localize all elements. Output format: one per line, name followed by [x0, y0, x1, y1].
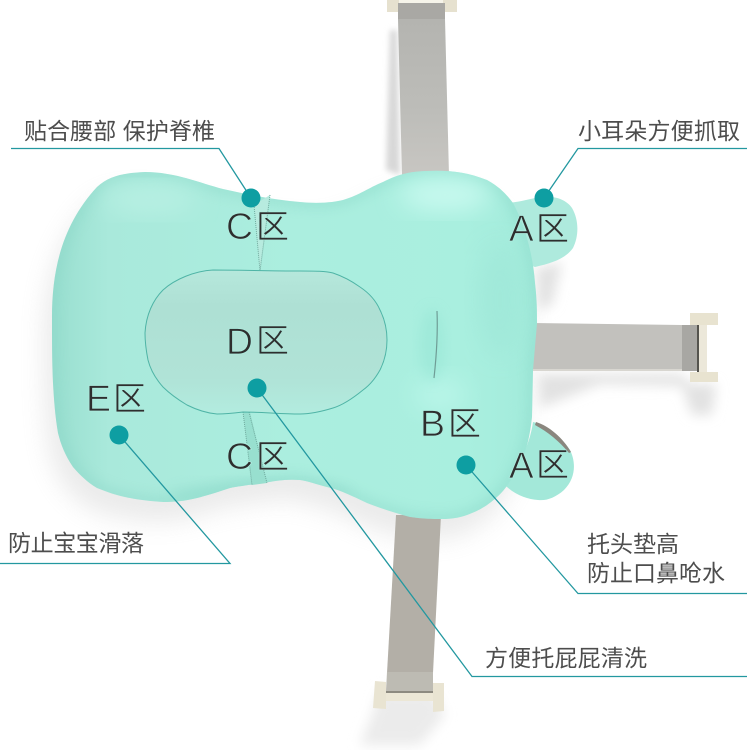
zone label: C top: [226, 200, 289, 248]
seam wedge: top: [254, 195, 270, 271]
cushion body: [52, 171, 537, 519]
zone label: A bottom: A: [509, 445, 534, 486]
zone label: D: [226, 314, 289, 362]
right strap and buckle: [533, 313, 718, 382]
soft highlights: [400, 179, 490, 211]
caption: easy washing: 方便托屁屁清洗: [485, 645, 647, 671]
zone label: C top: 区: [256, 200, 289, 248]
zone label: E: [86, 372, 146, 420]
zone label: B: 区: [448, 397, 481, 445]
caption: anti slip: 防止宝宝滑落: [8, 530, 144, 556]
leader line: B zone: [466, 465, 747, 594]
zone label: C top: C: [226, 206, 253, 247]
zone label: D: 区: [256, 314, 289, 362]
leader line: C zone: [11, 148, 251, 198]
zone label: A top: 区: [536, 202, 569, 250]
zone label: A top: [509, 202, 569, 250]
bottom strap and buckle: [373, 515, 444, 712]
zone label: A top: A: [509, 208, 534, 249]
edge shading: [52, 171, 537, 519]
caption: waist support: 贴合腰部 保护脊椎: [24, 118, 215, 144]
zone label: C bottom: C: [226, 436, 253, 477]
zone label: B: [420, 397, 481, 445]
marker dot: B zone: [456, 456, 476, 474]
top strap and buckle: [387, 0, 457, 175]
marker dot: E zone: [110, 426, 128, 444]
zone label: B: B: [420, 403, 445, 444]
panel: inner mesh zone D: [145, 270, 387, 414]
marker dot: A zone: [534, 188, 554, 208]
lower ear: [503, 422, 574, 500]
leader line: D zone: [257, 388, 747, 676]
seam wedge: bottom: [243, 412, 267, 485]
marker dot: C zone: [242, 188, 260, 208]
caption: head support: 托头垫高: [587, 531, 679, 557]
caption: head support: [587, 531, 725, 586]
zone label: A bottom: 区: [536, 438, 569, 486]
zone label: E: E: [86, 378, 111, 419]
zone label: A bottom: [509, 438, 569, 486]
caption: head support: 防止口鼻呛水: [587, 560, 725, 586]
leader line: A zone: [544, 148, 747, 198]
zone label: E: 区: [113, 372, 146, 420]
caption: ear grip: 小耳朵方便抓取: [578, 118, 740, 144]
zone label: C bottom: 区: [256, 430, 289, 478]
marker dot: D zone: [248, 378, 266, 398]
zone label: C bottom: [226, 430, 289, 478]
headrest seam: [434, 311, 437, 378]
leader line: E zone: [0, 435, 230, 564]
upper ear: [505, 197, 577, 267]
zone label: D: D: [226, 321, 253, 362]
